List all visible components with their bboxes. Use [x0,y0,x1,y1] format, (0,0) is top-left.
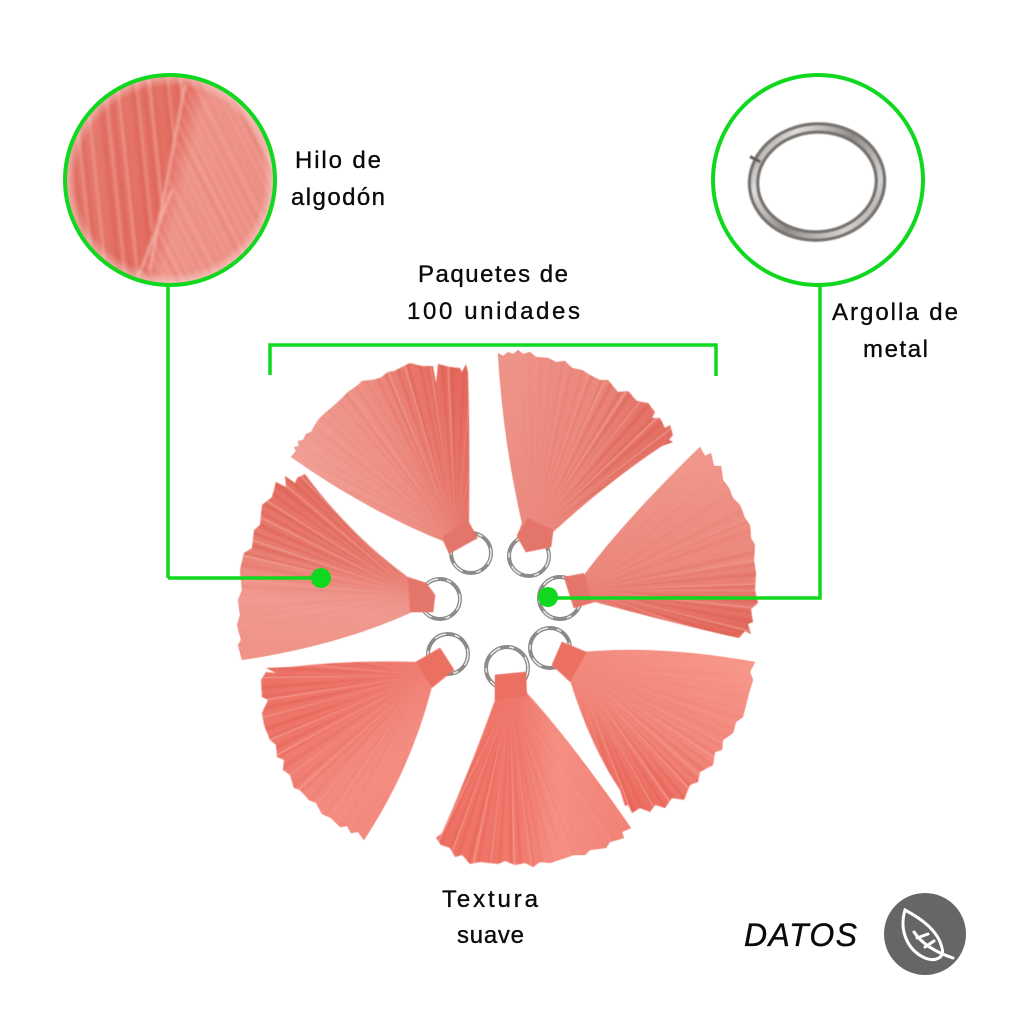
panel: thread close-up circle [67,77,273,283]
label: Hilo de algodón [291,147,385,211]
label: Textura suave: Textura [442,886,539,913]
label: Paquetes de 100 unidades: 100 unidades [407,298,580,325]
icon: feather badge [884,893,966,975]
tassel: lower left [260,648,455,840]
bracket over tassels [270,345,716,376]
label: DATOS: DATOS [744,917,857,953]
panel: metal ring circle [713,75,923,285]
tassel: right [564,446,758,639]
connector: thread circle to tassel [168,568,331,588]
tassel: lower right [551,641,756,814]
icon: metal ring [748,124,884,240]
thread circle outline [65,75,275,285]
tassels wheel [237,350,758,867]
collar [408,577,435,612]
collar [564,573,592,608]
label: Argolla de metal [832,299,958,363]
tassel: upper right [498,350,674,553]
collar [443,520,478,554]
label: Hilo de algodón: algodón [291,184,385,211]
tassel: left [236,474,436,660]
collar [416,648,454,688]
label: Textura suave [442,886,539,949]
collar [552,642,587,682]
label: Textura suave: suave [457,922,524,949]
infographic canvas [63,73,966,975]
line from thread circle down [166,285,170,578]
rings of tassels [420,533,581,689]
collar [517,518,553,552]
tassel: upper left [290,362,478,554]
label: Paquetes de 100 unidades [407,261,580,325]
label: Hilo de algodón: Hilo de [295,147,381,174]
collar [495,672,527,700]
label: Paquetes de 100 unidades: Paquetes de [418,261,568,288]
connector: ring circle to tassel ring [538,285,820,607]
label: Argolla de metal: Argolla de [832,299,958,326]
tassel: bottom [436,671,632,868]
label: Argolla de metal: metal [863,336,928,363]
